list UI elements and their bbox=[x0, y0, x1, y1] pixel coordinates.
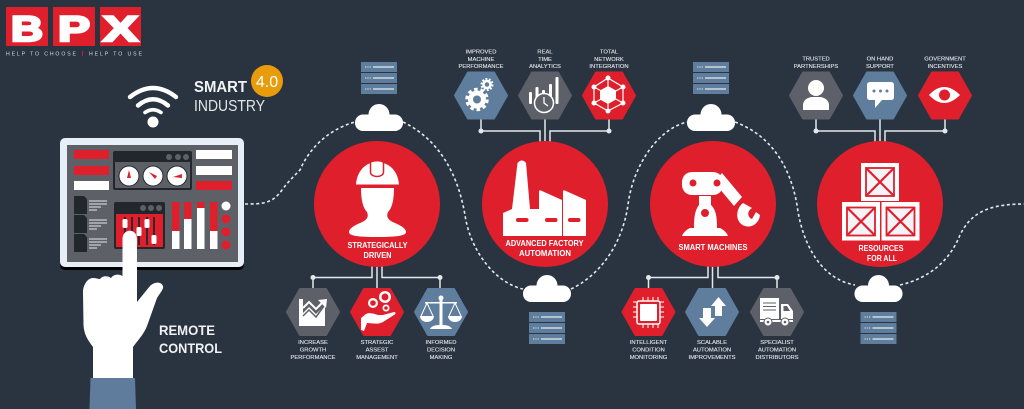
panel: resources for all: RESOURCES bbox=[858, 244, 904, 253]
icon: factory bbox=[503, 160, 586, 236]
logo: BPX bbox=[6, 7, 143, 58]
caption: INTELLIGENT bbox=[630, 340, 668, 346]
caption: ON HAND bbox=[867, 56, 893, 62]
left status bars bbox=[74, 150, 109, 190]
hexagon: on hand support bbox=[854, 56, 906, 118]
caption: GROWTH bbox=[300, 348, 326, 354]
caption bbox=[866, 56, 894, 70]
cloud and server 4 bbox=[854, 275, 902, 344]
hexagon: total network integration bbox=[583, 50, 635, 118]
gauges panel bbox=[113, 151, 192, 190]
hexagon: real time analytics bbox=[519, 50, 571, 118]
icon: gears bbox=[467, 79, 492, 110]
caption bbox=[794, 56, 838, 70]
cloud and server 2 bbox=[523, 275, 571, 344]
caption: IMPROVEMENTS bbox=[688, 355, 736, 361]
panel: resources for all: FOR ALL bbox=[867, 254, 897, 263]
caption: MAKING bbox=[430, 355, 453, 361]
clouds and servers bbox=[355, 62, 902, 344]
cloud and server 3 bbox=[687, 62, 735, 131]
icon: scales bbox=[420, 296, 462, 329]
icon: up and down arrows bbox=[699, 297, 726, 327]
caption: SPECIALIST bbox=[760, 340, 794, 346]
caption: PERFORMANCE bbox=[458, 64, 504, 70]
sleeve bbox=[90, 378, 136, 409]
hexagon: trusted partnerships bbox=[790, 56, 842, 118]
caption: MACHINE bbox=[468, 57, 494, 63]
heading: smart industry 4.0: INDUSTRY bbox=[194, 98, 265, 115]
caption: STRATEGIC bbox=[361, 340, 393, 346]
hexagon: intelligent condition monitoring bbox=[622, 289, 674, 361]
caption: PARTNERSHIPS bbox=[794, 64, 838, 70]
logo: BPX: B bbox=[11, 10, 43, 49]
panel: strategically driven bbox=[314, 141, 440, 267]
logo: BPX: X bbox=[103, 10, 139, 49]
logo: BPX: HELP TO CHOOSE bbox=[6, 52, 77, 58]
icon: growth chart bbox=[299, 299, 327, 326]
indicator dots bbox=[222, 202, 230, 250]
panel: smart machines bbox=[650, 141, 776, 267]
icon: delivery truck bbox=[760, 298, 793, 326]
icon: bars and clock bbox=[529, 77, 558, 112]
panel: strategically driven: STRATEGICALLY bbox=[348, 241, 408, 250]
icon: person bbox=[803, 80, 829, 110]
hexagon: scalable automation improvements bbox=[686, 289, 738, 361]
logo: BPX: P bbox=[58, 10, 90, 49]
slider panel bbox=[114, 202, 165, 249]
panel: advanced factory automation bbox=[482, 141, 608, 267]
logo: BPX: HELP TO USE bbox=[89, 52, 143, 58]
caption: DISTRIBUTORS bbox=[755, 355, 799, 361]
caption: PERFORMANCE bbox=[290, 355, 336, 361]
caption: INCENTIVES bbox=[928, 64, 963, 70]
icon: crates bbox=[842, 163, 920, 240]
caption bbox=[924, 56, 966, 70]
icon: wifi bbox=[130, 88, 176, 128]
caption: TRUSTED bbox=[802, 56, 830, 62]
caption: SCALABLE bbox=[697, 340, 727, 346]
caption bbox=[426, 340, 456, 361]
caption bbox=[589, 50, 629, 70]
level bars bbox=[172, 202, 218, 249]
icon: eye bbox=[929, 87, 960, 103]
caption: TOTAL bbox=[600, 50, 619, 56]
dashed network path bbox=[245, 122, 1024, 289]
caption: IMPROVED bbox=[466, 50, 496, 56]
document list bbox=[74, 196, 107, 252]
caption bbox=[356, 340, 398, 361]
hexagon: increase growth performance bbox=[287, 289, 339, 361]
caption: GOVERNMENT bbox=[924, 56, 966, 62]
caption: REAL bbox=[537, 50, 553, 56]
panel: strategically driven: DRIVEN bbox=[364, 251, 392, 260]
connectors bbox=[310, 119, 948, 288]
caption: DECISION bbox=[427, 348, 455, 354]
icon: robot arm bbox=[682, 172, 760, 236]
caption bbox=[688, 340, 736, 361]
hexagon: improved machine performance bbox=[455, 50, 507, 118]
caption: AUTOMATION bbox=[758, 348, 796, 354]
caption: NETWORK bbox=[594, 57, 624, 63]
icon: chip bbox=[633, 297, 664, 328]
caption: SUPPORT bbox=[866, 64, 894, 70]
cloud and server 1 bbox=[355, 62, 403, 131]
hexagon: strategic assest management bbox=[351, 289, 403, 361]
caption: ANALYTICS bbox=[529, 64, 561, 70]
caption: INTEGRATION bbox=[589, 64, 629, 70]
heading: smart industry 4.0 bbox=[194, 65, 283, 115]
heading: smart industry 4.0: SMART bbox=[194, 79, 247, 96]
caption: MANAGEMENT bbox=[356, 355, 398, 361]
label: remote control: CONTROL bbox=[159, 340, 222, 356]
icon: worker with hard hat bbox=[349, 162, 406, 237]
panel: tablet bbox=[60, 138, 244, 270]
caption bbox=[458, 50, 504, 70]
hexagon: informed decision making bbox=[415, 289, 467, 361]
icon: hand with coins bbox=[361, 291, 396, 331]
caption: INCREASE bbox=[298, 340, 328, 346]
caption bbox=[630, 340, 668, 361]
panel: smart machines: SMART MACHINES bbox=[678, 243, 748, 252]
caption bbox=[755, 340, 799, 361]
hexagon: specialist automation distributors bbox=[751, 289, 803, 361]
icon: hand pressing tablet bbox=[83, 231, 163, 409]
caption: CONDITION bbox=[632, 348, 665, 354]
hexagon: government incentives bbox=[919, 56, 971, 118]
label: remote control bbox=[159, 322, 222, 356]
caption bbox=[529, 50, 561, 70]
panel: advanced factory automation: AUTOMATION bbox=[519, 249, 571, 258]
icon: network bbox=[592, 76, 626, 114]
caption bbox=[290, 340, 336, 361]
caption: ASSEST bbox=[366, 348, 389, 354]
icon: speech bubble bbox=[867, 82, 894, 108]
label: remote control: REMOTE bbox=[159, 322, 215, 338]
caption: MONITORING bbox=[630, 355, 668, 361]
heading: smart industry 4.0: 4.0 bbox=[256, 74, 278, 91]
caption: AUTOMATION bbox=[693, 348, 731, 354]
caption: INFORMED bbox=[426, 340, 456, 346]
panel: advanced factory automation: ADVANCED FACTORY bbox=[506, 239, 584, 248]
right status bars bbox=[196, 150, 232, 190]
caption: TIME bbox=[538, 57, 552, 63]
panel: resources for all bbox=[817, 141, 943, 267]
